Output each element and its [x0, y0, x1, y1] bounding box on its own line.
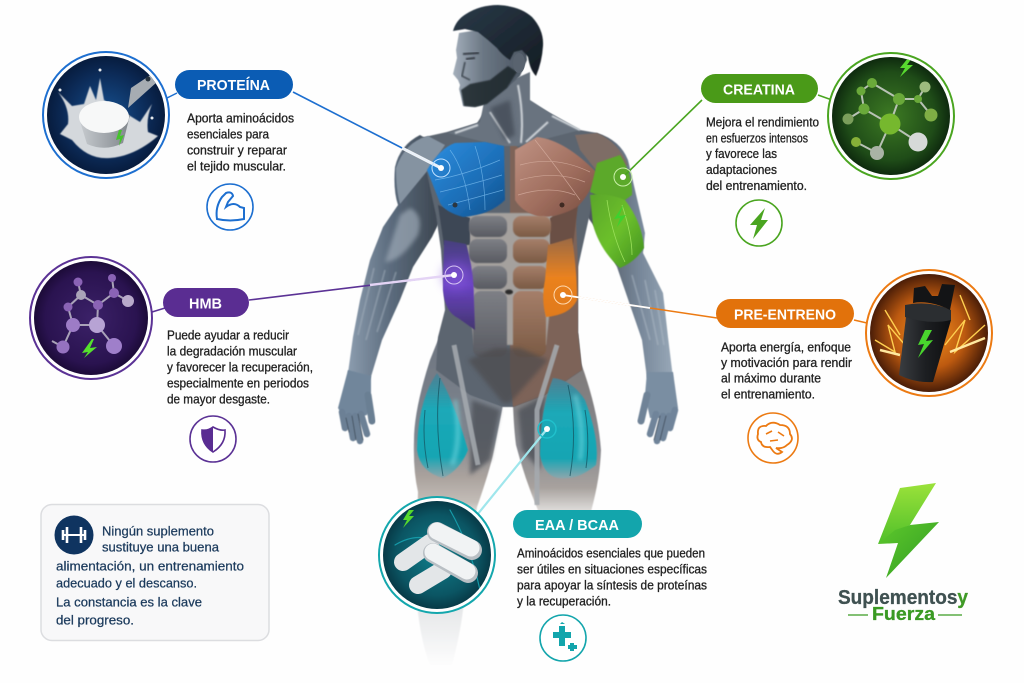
label pill: PRE-ENTRENO — [734, 306, 836, 324]
note text: sustituye una buena — [102, 540, 220, 554]
description — [167, 328, 313, 406]
description: para apoyar la síntesis de proteínas — [517, 578, 707, 592]
note text: La constancia es la clave — [56, 594, 202, 610]
brand name: Suplementosy — [838, 587, 969, 609]
right shoulder — [575, 133, 628, 175]
right hand — [641, 372, 678, 441]
circle image: purple molecule — [30, 257, 152, 379]
right leg — [510, 333, 601, 515]
nipple right — [560, 202, 564, 208]
panel: pre-entreno — [716, 270, 992, 463]
abs backing — [466, 213, 552, 345]
description: el tejido muscular. — [187, 160, 286, 174]
inner thigh shadows — [470, 395, 545, 475]
panel: eaa / bcaa — [379, 497, 707, 661]
right arm — [575, 133, 673, 378]
left leg — [414, 335, 510, 665]
label pill — [701, 74, 818, 103]
green biceps — [590, 194, 644, 268]
label pill: CREATINA — [723, 82, 795, 98]
hair — [453, 5, 543, 76]
description: Aporta energía, enfoque — [721, 340, 851, 354]
abs — [469, 216, 551, 357]
label pill — [175, 70, 293, 99]
left hand — [338, 370, 372, 441]
note text: alimentación, un entrenamiento — [56, 558, 244, 574]
description: especialmente en periodos — [167, 376, 309, 390]
description: y favorece las — [706, 147, 777, 161]
icon: flexed arm — [207, 184, 253, 230]
brand subtitle: Fuerza — [872, 604, 936, 624]
icon: bolt — [736, 200, 782, 246]
nipple left — [452, 202, 458, 208]
description: la degradación muscular — [167, 344, 297, 358]
panel: hmb — [30, 257, 313, 462]
neck highlights — [455, 85, 580, 143]
description: adaptaciones — [706, 163, 777, 177]
torso warm half — [510, 140, 582, 407]
nose shadow — [462, 62, 470, 80]
icon: plus — [540, 615, 586, 661]
right quad — [540, 378, 597, 479]
quad lines — [424, 378, 588, 476]
description: Aminoácidos esenciales que pueden — [517, 546, 705, 560]
purple glow — [442, 262, 470, 290]
note text: adecuado y el descanso. — [56, 576, 197, 590]
description: Aporta aminoácidos — [187, 112, 294, 126]
circle image: capsules — [379, 497, 495, 613]
left pec blue — [427, 142, 505, 217]
description: el entrenamiento. — [721, 388, 815, 402]
orange oblique — [543, 238, 577, 317]
left serratus — [438, 205, 470, 245]
anatomical figure — [338, 5, 678, 665]
description: ser útiles en situaciones específicas — [517, 562, 707, 576]
circle image: shaker with lightning — [866, 270, 992, 396]
connector: creatina — [614, 95, 832, 186]
description: y motivación para rendir — [721, 356, 852, 370]
circle image: green molecule — [828, 53, 954, 179]
description: y la recuperación. — [517, 594, 611, 608]
description — [187, 112, 294, 174]
label pill: HMB — [189, 296, 222, 312]
description: de mayor desgaste. — [167, 392, 270, 406]
left quad — [417, 373, 468, 478]
panel: proteina — [43, 52, 294, 230]
connector: hmb — [152, 266, 463, 312]
quad highlights — [452, 395, 582, 465]
panel: creatina — [701, 53, 954, 246]
neck shadow — [490, 100, 515, 140]
brand subtitle — [848, 604, 962, 624]
green shoulder — [590, 155, 632, 205]
right pec brown — [515, 137, 597, 217]
neck — [448, 72, 580, 146]
callout: note box — [41, 504, 269, 640]
left arm — [348, 135, 450, 380]
description: construir y reparar — [187, 144, 287, 158]
center line — [508, 143, 512, 345]
description: Mejora el rendimiento — [706, 116, 819, 130]
torso — [420, 100, 597, 407]
circle image: scoop with milk splash — [43, 52, 169, 178]
note text: Ningún suplemento — [102, 524, 214, 538]
icon: shield — [190, 416, 236, 462]
face — [453, 28, 527, 107]
right forearm streaks — [632, 275, 664, 345]
ear — [513, 53, 525, 73]
description — [706, 116, 819, 193]
shoulder left — [396, 136, 445, 204]
label pill: PROTEÍNA — [197, 77, 270, 94]
purple oblique — [443, 240, 475, 330]
connector: eaa — [477, 420, 556, 515]
label pill — [513, 510, 642, 538]
label pill — [716, 299, 854, 328]
description: del entrenamiento. — [706, 179, 807, 193]
icon: logo bolt — [878, 483, 939, 578]
description: al máximo durante — [721, 372, 821, 386]
note text: del progreso. — [56, 612, 134, 628]
description: y favorecer la recuperación, — [167, 360, 313, 374]
beard — [461, 66, 517, 107]
logo — [838, 483, 969, 624]
connector: proteina — [167, 92, 450, 177]
description: en esfuerzos intensos — [706, 132, 808, 146]
right serratus — [550, 205, 578, 245]
connector: pre-entreno — [554, 286, 867, 323]
description: esenciales para — [187, 128, 269, 142]
icon: brain — [748, 413, 798, 463]
eye and brow — [463, 53, 479, 59]
hip shadow — [468, 348, 548, 403]
label pill — [163, 288, 249, 317]
label pill: EAA / BCAA — [535, 517, 619, 534]
icon: dumbbell — [54, 516, 94, 554]
left forearm streaks — [358, 268, 396, 340]
description — [517, 546, 707, 608]
thigh straps — [454, 345, 557, 505]
description: Puede ayudar a reducir — [167, 328, 289, 342]
description — [721, 340, 852, 402]
left arm muscle highlights — [385, 208, 420, 262]
note text — [56, 524, 244, 628]
